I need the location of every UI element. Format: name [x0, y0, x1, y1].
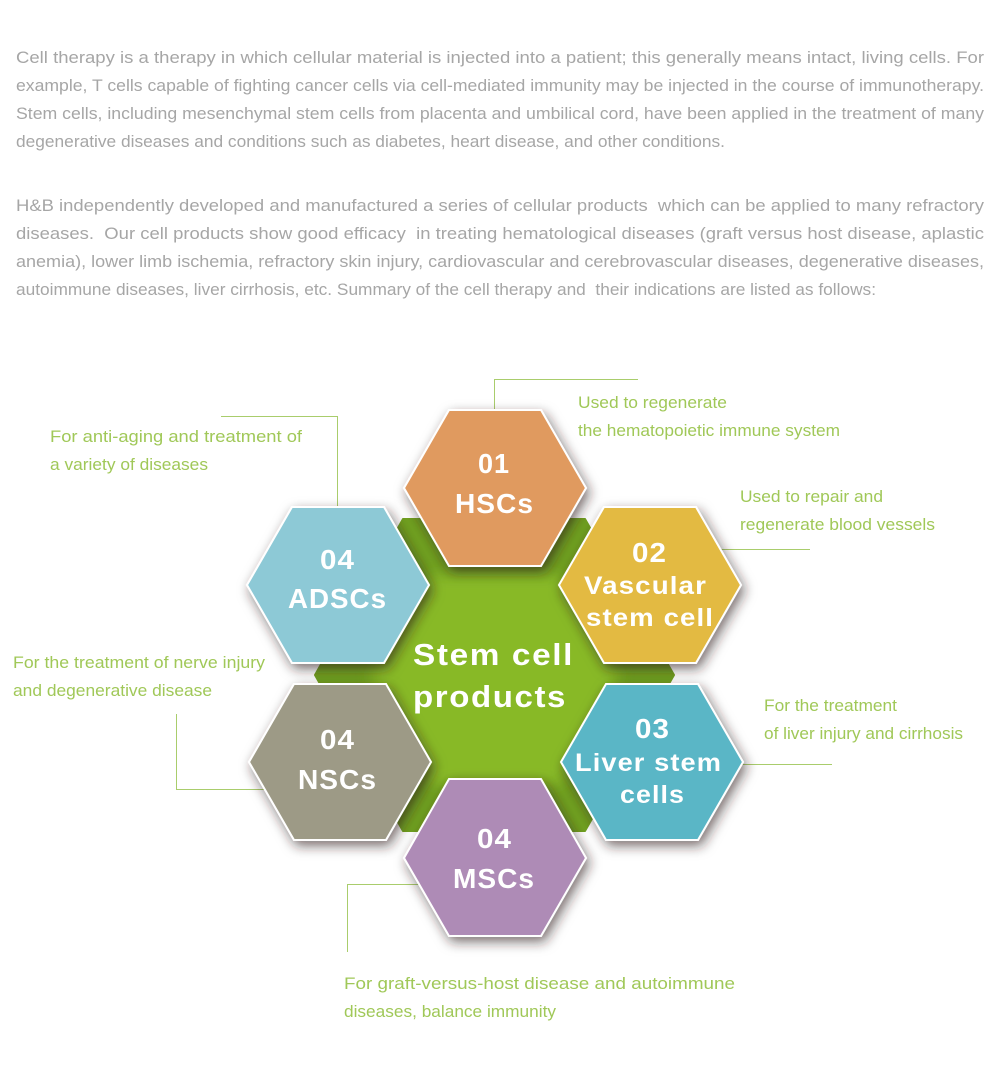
label: HSCs: the hematopoietic immune system — [578, 422, 840, 440]
hexagon: NSCs: 04 — [320, 724, 355, 755]
hexagon: Vascular stem cell — [559, 507, 741, 663]
label: Liver stem cells: of liver injury and cirrhosis — [764, 725, 963, 743]
label: Vascular stem cell — [740, 488, 935, 534]
label: NSCs: For the treatment of nerve injury — [13, 654, 266, 672]
connector: ADSCs — [221, 416, 338, 508]
central heading: products — [413, 679, 567, 714]
hexagon: ADSCs: 04 — [320, 544, 355, 575]
central heading — [413, 637, 574, 714]
hexagon: NSCs — [249, 684, 431, 840]
central heading: Stem cell — [413, 637, 574, 672]
connector: HSCs — [494, 380, 638, 410]
intro paragraph 1: degenerative diseases and conditions such as diabetes, heart disease, and other conditions. — [16, 133, 725, 151]
connector: MSCs — [348, 884, 420, 952]
hexagon: Liver stem cells — [561, 684, 743, 840]
connector: NSCs — [176, 714, 264, 790]
intro paragraph 1: Cell therapy is a therapy in which cellular material is injected into a patient; this generally means intact, living cells. For — [16, 49, 985, 67]
hexagon: Vascular stem cell: stem cell — [586, 604, 714, 632]
label: Vascular stem cell: regenerate blood vessels — [740, 516, 935, 534]
hexagon: Liver stem cells: 03 — [635, 713, 670, 744]
intro paragraph 2: anemia), lower limb ischemia, refractory skin injury, cardiovascular and cerebrovascular diseases, degenerative diseases, — [16, 253, 984, 271]
intro paragraph 2: H&B independently developed and manufactured a series of cellular products which can be applied to many refractory — [16, 197, 985, 215]
central hexagon — [315, 519, 674, 831]
hexagon: MSCs: 04 — [477, 823, 512, 854]
connector: Liver stem cells — [738, 764, 832, 766]
label: HSCs: Used to regenerate — [578, 394, 727, 412]
label: NSCs — [13, 654, 266, 700]
label: Vascular stem cell: Used to repair and — [740, 488, 883, 506]
intro paragraph 2: autoimmune diseases, liver cirrhosis, etc. Summary of the cell therapy and their indications are listed as follows: — [16, 281, 876, 299]
intro paragraph 1: example, T cells capable of fighting cancer cells via cell-mediated immunity may be injected in the course of immunotherapy. — [16, 77, 984, 95]
hexagon: Liver stem cells: Liver stem — [575, 749, 722, 777]
connector: Vascular stem cell — [717, 548, 810, 550]
label: HSCs — [578, 394, 840, 440]
label: Liver stem cells: For the treatment — [764, 697, 897, 715]
hexagon: HSCs: 01 — [478, 448, 510, 479]
intro paragraph 1: Stem cells, including mesenchymal stem cells from placenta and umbilical cord, have been applied in the treatment of many — [16, 105, 985, 123]
intro paragraph 2 — [16, 197, 985, 299]
intro paragraph 2: diseases. Our cell products show good efficacy in treating hematological diseases (graft versus host disease, aplastic — [16, 225, 984, 243]
intro paragraph 1 — [16, 49, 985, 151]
hexagon: MSCs — [404, 779, 586, 936]
hexagon: HSCs: HSCs — [455, 488, 534, 519]
hexagon: Liver stem cells: cells — [620, 781, 685, 809]
label: MSCs: For graft-versus-host disease and autoimmune — [344, 975, 735, 993]
label: Liver stem cells — [764, 697, 963, 743]
label: MSCs — [344, 975, 735, 1021]
hexagon: HSCs — [404, 410, 586, 566]
label: ADSCs: a variety of diseases — [50, 456, 208, 474]
hexagon: Vascular stem cell: 02 — [632, 537, 667, 568]
central hexagon light core — [370, 575, 620, 785]
label: MSCs: diseases, balance immunity — [344, 1003, 557, 1021]
hexagon: MSCs: MSCs — [453, 863, 535, 894]
hexagon: ADSCs — [247, 507, 429, 663]
label: ADSCs — [50, 428, 302, 474]
hexagon: Vascular stem cell: Vascular — [584, 572, 707, 600]
hexagon: NSCs: NSCs — [298, 764, 377, 795]
label: ADSCs: For anti-aging and treatment of — [50, 428, 302, 446]
label: NSCs: and degenerative disease — [13, 682, 212, 700]
hexagon: ADSCs: ADSCs — [288, 583, 387, 614]
